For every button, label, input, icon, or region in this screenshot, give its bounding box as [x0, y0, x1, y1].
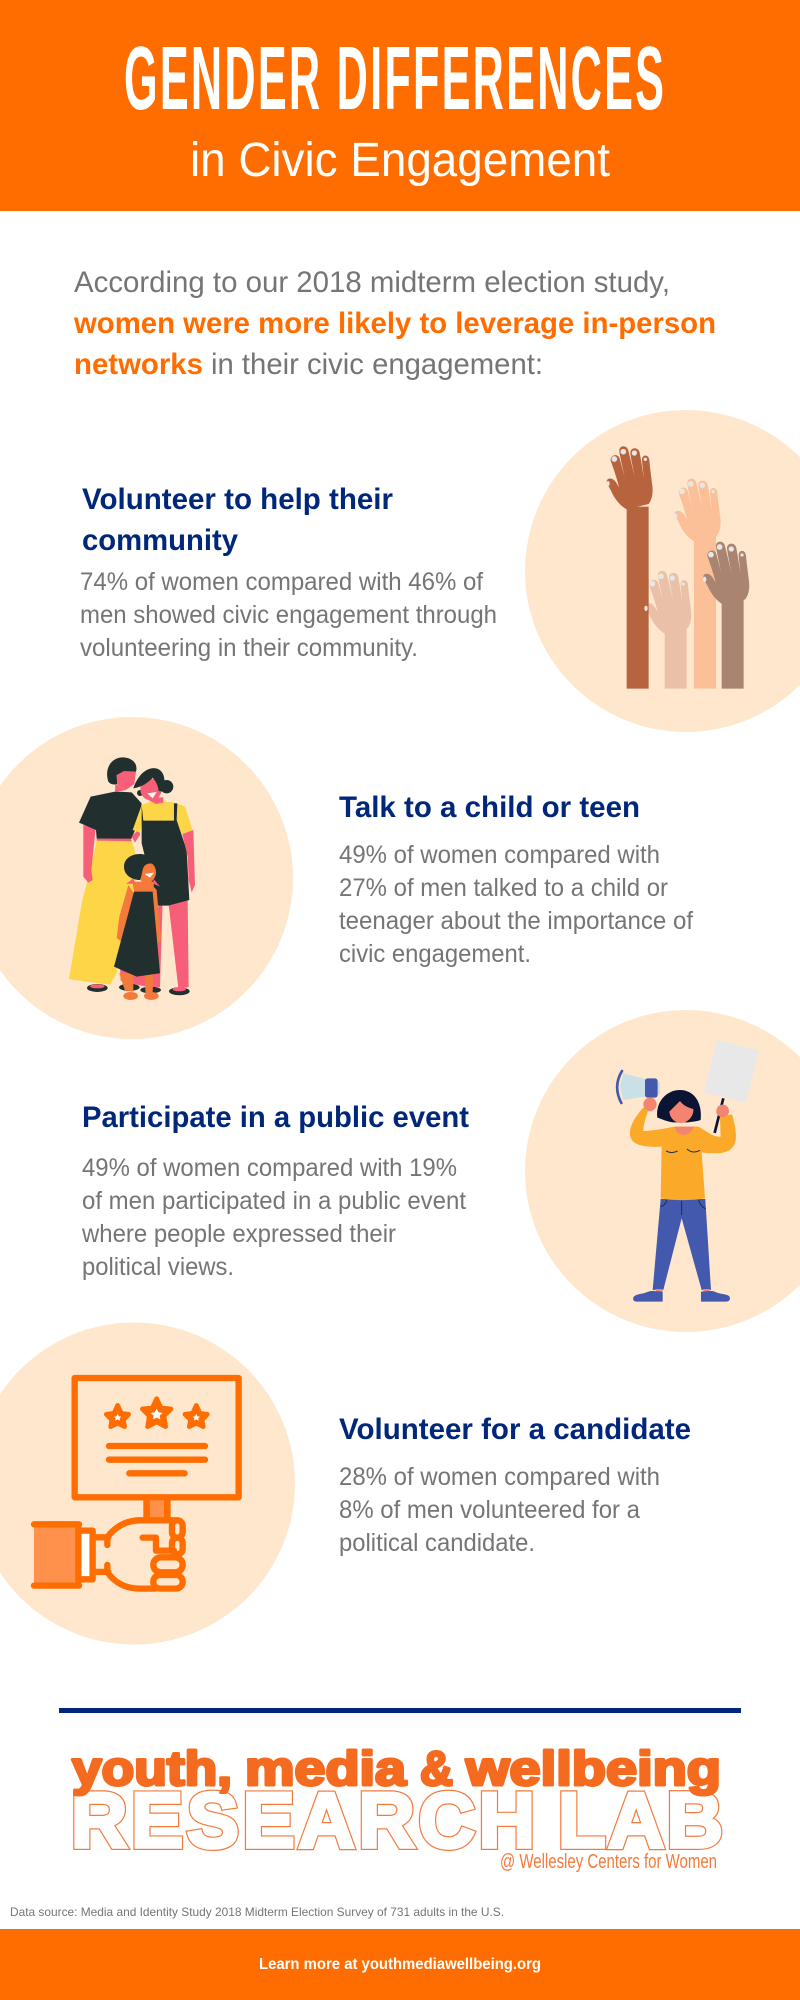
icon: hand holding campaign sign — [34, 1378, 239, 1589]
logo: youth, media & wellbeing research lab: media — [245, 1743, 406, 1796]
text: talk statistic: 49% of women compared with — [339, 841, 660, 869]
heading: volunteer to help their community: community — [82, 524, 238, 557]
text: talk statistic: civic engagement. — [339, 940, 531, 968]
heading: volunteer to help their community — [82, 483, 393, 557]
logo: youth, media & wellbeing research lab — [71, 1743, 723, 1873]
text: candidate statistic: 28% of women compared with — [339, 1463, 660, 1491]
text: talk statistic: teenager about the importance of — [339, 907, 693, 935]
heading: volunteer to help their community: Volunteer to help their — [82, 483, 393, 516]
text: event statistic: of men participated in a public event — [82, 1187, 466, 1215]
subtitle: in Civic Engagement — [190, 134, 610, 187]
icon: protester with megaphone and sign — [617, 1040, 759, 1302]
header banner — [0, 0, 800, 211]
intro paragraph: in their civic engagement: — [211, 348, 543, 381]
logo: youth, media & wellbeing research lab: LAB — [558, 1776, 723, 1864]
heading: talk to a child or teen: Talk to a child or teen — [339, 791, 640, 824]
panel: talk to a child or teen — [0, 717, 693, 1039]
text: event statistic: political views. — [82, 1253, 234, 1281]
panel: volunteer to help community — [80, 410, 800, 732]
text: volunteer statistic: men showed civic engagement through — [80, 601, 497, 629]
logo: youth, media & wellbeing research lab: wellbeing — [465, 1743, 721, 1796]
text: candidate statistic: 8% of men volunteered for a — [339, 1496, 640, 1524]
icon: circle with raised hands — [525, 410, 800, 732]
logo: youth, media & wellbeing research lab: RESEARCH — [71, 1776, 535, 1864]
icon: circle with family — [0, 717, 293, 1039]
logo: youth, media & wellbeing research lab: RESEARCH — [71, 1776, 535, 1864]
data source note: Data source: Media and Identity Study 2018 Midterm Election Survey of 731 adults in the U.S. — [10, 1906, 504, 1919]
intro paragraph: According to our 2018 midterm election study, — [74, 266, 670, 299]
text: talk statistic: 27% of men talked to a child or — [339, 874, 668, 902]
logo: youth, media & wellbeing research lab: @ Wellesley Centers for Women — [500, 1851, 717, 1873]
logo: youth, media & wellbeing research lab: & — [420, 1743, 453, 1796]
text: volunteer statistic: volunteering in their community. — [80, 634, 418, 662]
panel: volunteer for a candidate — [0, 1322, 691, 1644]
text: volunteer statistic: 74% of women compared with 46% of — [80, 568, 483, 596]
icon: family illustration — [69, 757, 195, 1000]
footer link text: Learn more at youthmediawellbeing.org — [259, 1956, 541, 1973]
logo: youth, media & wellbeing research lab: youth, — [72, 1743, 232, 1796]
icon: circle with protester — [525, 1010, 800, 1332]
footer banner — [0, 1929, 800, 2000]
text: event statistic: 49% of women compared with 19% — [82, 1154, 457, 1182]
text: volunteer statistic — [80, 568, 497, 662]
logo: youth, media & wellbeing research lab: LAB — [558, 1776, 723, 1864]
text: talk statistic — [339, 841, 693, 968]
text: candidate statistic — [339, 1463, 660, 1557]
intro paragraph — [73, 266, 716, 381]
text: event statistic — [81, 1154, 466, 1281]
icon: circle with hand holding sign — [0, 1322, 295, 1644]
intro paragraph: women were more likely to leverage in-person — [73, 307, 716, 340]
heading: participate in a public event: Participate in a public event — [82, 1101, 469, 1134]
intro paragraph: networks — [74, 348, 203, 381]
text: candidate statistic: political candidate. — [339, 1529, 535, 1557]
panel: participate in a public event — [81, 1010, 800, 1332]
title: GENDER DIFFERENCES — [124, 27, 664, 128]
divider line — [59, 1708, 741, 1713]
icon: raised hands — [606, 446, 749, 689]
text: event statistic: where people expressed their — [81, 1220, 396, 1248]
heading: volunteer for a candidate: Volunteer for a candidate — [339, 1413, 691, 1446]
